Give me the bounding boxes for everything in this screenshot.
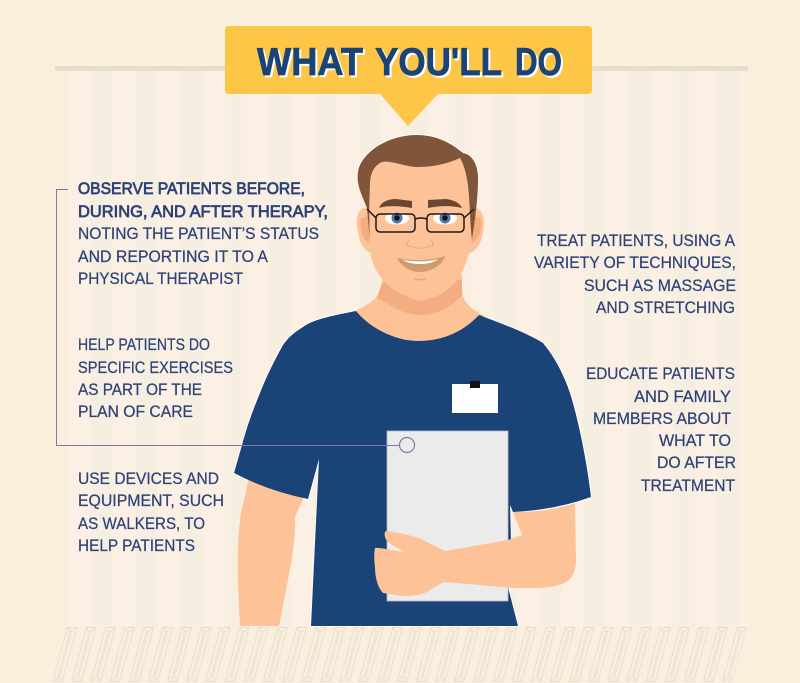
text: treat patients: AND STRETCHING	[596, 298, 735, 317]
text: help patients: AS PART OF THE	[78, 380, 202, 399]
character	[234, 135, 591, 626]
title	[257, 41, 562, 84]
text: educate patients: EDUCATE PATIENTS	[586, 364, 735, 383]
text: educate patients: MEMBERS ABOUT	[593, 409, 731, 428]
nose	[407, 240, 433, 248]
title: DO	[515, 41, 562, 84]
text: help patients	[78, 335, 233, 421]
mouth	[397, 256, 445, 272]
text: observe patients: AND REPORTING IT TO A	[78, 247, 269, 266]
text: observe patients: DURING, AND AFTER THERAPY,	[78, 202, 328, 221]
badge clip	[470, 381, 480, 388]
callout circle	[400, 438, 414, 452]
text: use devices: USE DEVICES AND	[78, 469, 219, 488]
hatched floor	[52, 627, 747, 682]
text: observe patients: OBSERVE PATIENTS BEFORE,	[78, 179, 305, 198]
eyes	[385, 212, 457, 224]
text: observe patients: PHYSICAL THERAPIST	[78, 269, 243, 288]
right arm and hand	[374, 503, 576, 596]
left arm	[238, 480, 304, 626]
title shadow: WHAT	[259, 43, 365, 86]
name badge	[452, 381, 498, 413]
title shadow: DO	[517, 43, 564, 86]
ear shading	[360, 216, 482, 243]
text: educate patients: WHAT TO	[659, 431, 731, 450]
neck shadow	[377, 280, 462, 315]
text: educate patients: AND FAMILY	[634, 387, 731, 406]
text: use devices: HELP PATIENTS	[78, 536, 195, 555]
striped wall	[68, 71, 745, 627]
neck	[350, 275, 485, 350]
ear left	[357, 208, 372, 253]
hair	[358, 135, 478, 242]
text: treat patients: TREAT PATIENTS, USING A	[537, 231, 736, 250]
text: treat patients: SUCH AS MASSAGE	[584, 276, 736, 295]
ceiling rail	[55, 66, 748, 71]
title banner	[225, 26, 592, 126]
text: observe patients	[78, 179, 328, 288]
title shadow: YOU'LL	[377, 43, 504, 86]
ear right	[469, 208, 484, 253]
glasses	[367, 209, 474, 232]
shirt	[234, 311, 591, 626]
text: observe patients: NOTING THE PATIENT’S STATUS	[78, 224, 319, 243]
text: treat patients	[534, 231, 736, 317]
clipboard	[387, 431, 508, 601]
banner speech bubble	[225, 26, 592, 126]
text: help patients: PLAN OF CARE	[78, 402, 193, 421]
text: use devices	[78, 469, 224, 555]
text: help patients: HELP PATIENTS DO	[78, 335, 210, 354]
text: use devices: AS WALKERS, TO	[78, 514, 205, 533]
title shadow	[259, 43, 564, 86]
teeth	[403, 259, 438, 264]
callout line	[56, 190, 414, 452]
chin mark	[414, 278, 426, 280]
text: help patients: SPECIFIC EXERCISES	[78, 358, 233, 377]
text: treat patients: VARIETY OF TECHNIQUES,	[534, 253, 736, 272]
text: educate patients: TREATMENT	[641, 476, 735, 495]
title: WHAT	[257, 41, 363, 84]
eyebrows	[379, 199, 462, 208]
text: educate patients: DO AFTER	[657, 453, 736, 472]
text: educate patients	[586, 364, 736, 495]
face	[369, 150, 470, 301]
title: YOU'LL	[375, 41, 502, 84]
text: use devices: EQUIPMENT, SUCH	[78, 491, 224, 510]
